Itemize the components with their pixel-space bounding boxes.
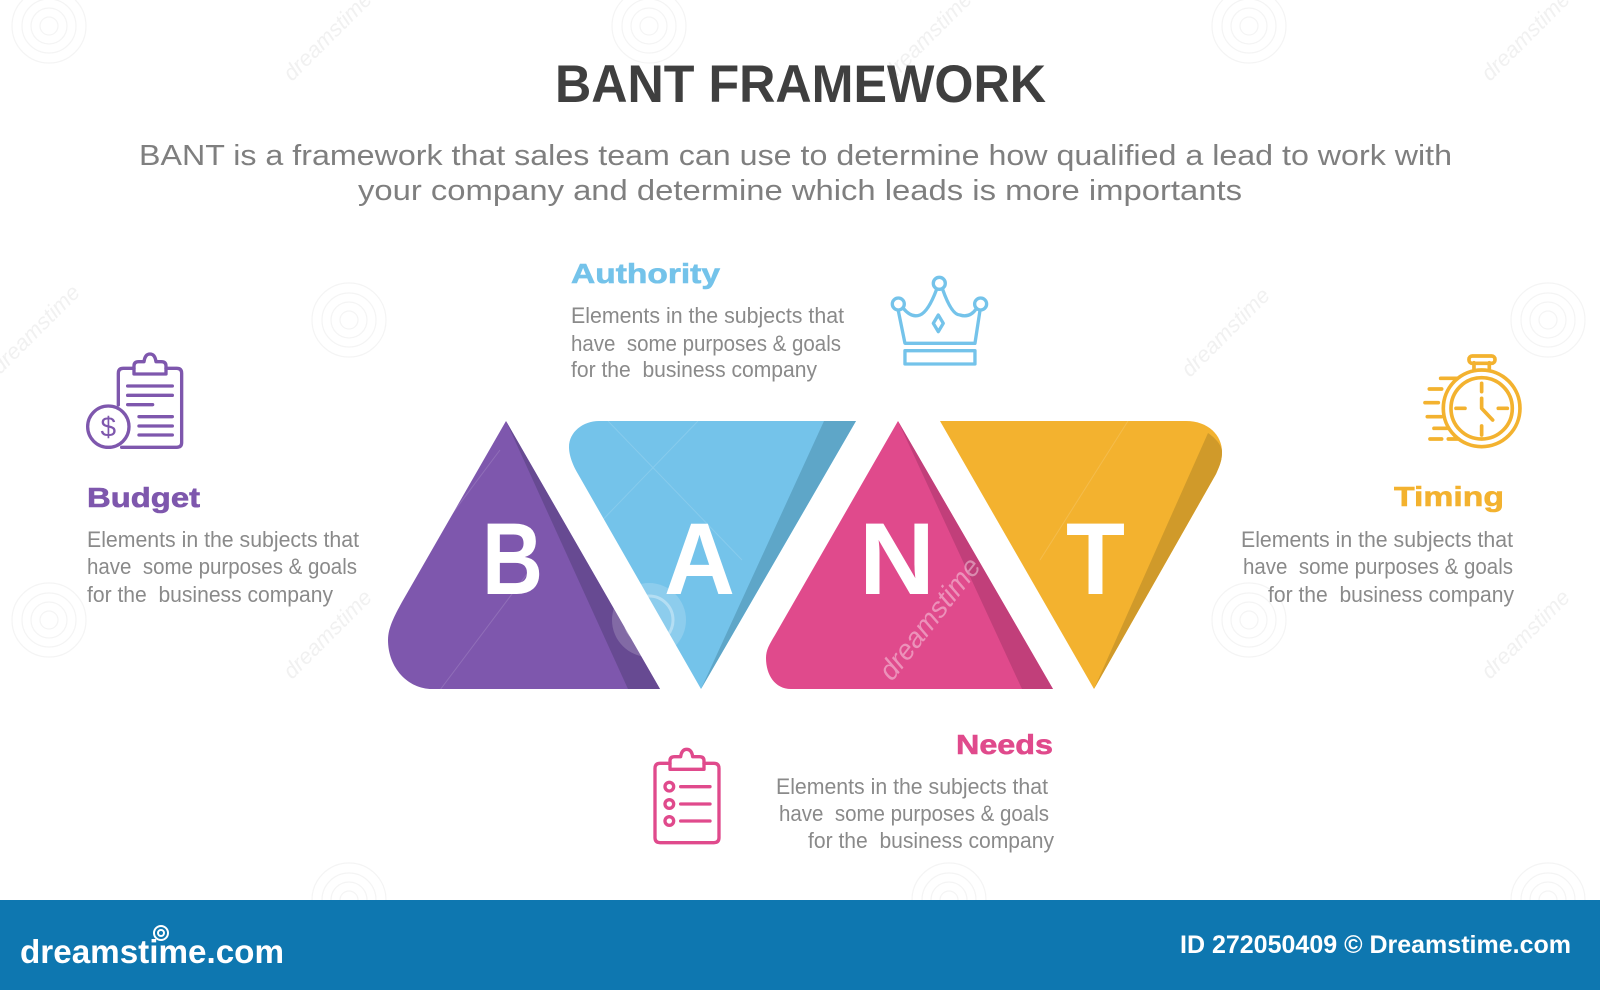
triangle: N pink: N (859, 502, 935, 616)
text: Needs description: for the business company (808, 828, 1054, 853)
text: Budget description: for the business company (87, 582, 333, 607)
text: Needs description: have some purposes & goals (779, 801, 1049, 826)
logo wordmark: dreamstime.com (20, 933, 284, 970)
image credit: ID 272050409 © Dreamstime.com (1180, 931, 1571, 959)
triangle: T gold: T (1066, 502, 1125, 616)
text: Authority description: for the business company (571, 357, 817, 382)
text: Authority description: Elements in the subjects that (571, 303, 844, 328)
panel: Budget (87, 354, 359, 607)
triangle: B purple (388, 421, 660, 689)
triangle: A blue (569, 421, 856, 689)
text: Budget description: have some purposes & goals (87, 554, 357, 579)
subtitle text (139, 140, 1452, 207)
icon: crown (892, 277, 987, 364)
text: Budget description (87, 527, 359, 607)
text: Authority description: have some purposes & goals (571, 331, 841, 356)
text: Budget description: Elements in the subjects that (87, 527, 359, 552)
text: dreamstime (278, 585, 377, 684)
text: Timing description (1241, 527, 1514, 607)
subtitle text: your company and determine which leads is more importants (358, 175, 1242, 207)
central BANT triangle diagram (388, 421, 1222, 689)
heading: Timing: Timing (1394, 481, 1504, 512)
text: Needs description (776, 774, 1054, 853)
footer banner (0, 900, 1600, 990)
panel: Needs (655, 729, 1054, 853)
icon: clipboard with dollar coin: $ (101, 412, 117, 443)
heading: Authority: Authority (571, 258, 721, 289)
text: Needs description: Elements in the subjects that (776, 774, 1048, 799)
text: dreamstime (1476, 585, 1575, 684)
text: Timing description: for the business company (1268, 582, 1514, 607)
text: Authority description (571, 303, 844, 382)
icon: stopwatch (1425, 356, 1520, 447)
icon: clipboard with dollar coin (88, 354, 182, 447)
triangle: N pink (766, 421, 1053, 689)
icon: logo spiral (154, 926, 168, 940)
title: BANT FRAMEWORK (555, 55, 1046, 114)
icon: checklist clipboard (655, 749, 719, 843)
text: dreamstime (872, 551, 987, 686)
panel: Timing (1241, 356, 1520, 607)
panel: Authority (571, 258, 987, 382)
text: Timing description: Elements in the subjects that (1241, 527, 1513, 552)
heading: Needs: Needs (956, 729, 1053, 760)
triangle: T gold (940, 421, 1222, 689)
text: Timing description: have some purposes & goals (1243, 554, 1513, 579)
subtitle text: BANT is a framework that sales team can use to determine how qualified a lead to work with (139, 140, 1452, 172)
text: dreamstime (1176, 283, 1275, 382)
heading: Budget: Budget (87, 482, 200, 513)
triangle: A blue: A (664, 502, 735, 616)
triangle: B purple: B (482, 502, 543, 616)
